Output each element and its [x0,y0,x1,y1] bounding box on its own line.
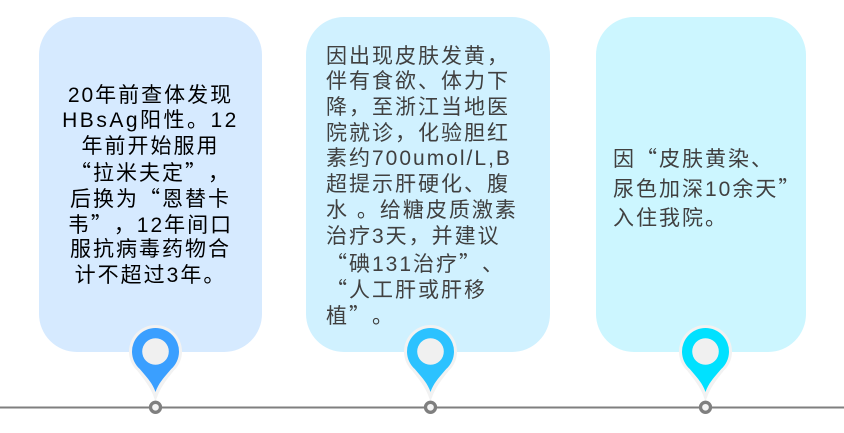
treatment text: 治疗3天，并建议 [326,225,501,248]
panel: local treatment card [306,17,550,352]
treatment text [326,45,518,330]
history text: “拉米夫定”， [70,157,231,187]
panel: history card [39,17,262,352]
history text: 韦”，12年间口 [68,209,233,239]
marker: second event [404,325,457,412]
treatment text: 植”。 [326,300,395,330]
treatment text: 院就诊，化验胆红 [326,122,510,145]
treatment text: 伴有食欲、体力下 [326,70,510,93]
history text [62,84,239,287]
history text: HBsAg阳性。12 [62,109,239,132]
marker: third event [679,325,732,412]
treatment text: 因出现皮肤发黄， [326,45,510,68]
admission text: 入住我院。 [613,207,728,230]
history text: 年前开始服用 [82,135,220,158]
admission text: 尿色加深10余天” [613,173,801,203]
treatment text: 水 。给糖皮质激素 [326,199,518,222]
treatment text: “人工肝或肝移 [326,274,487,304]
treatment text: 素约700umol/L,B [326,147,512,170]
history text: 服抗病毒药物合 [70,238,231,261]
history text: 计不超过3年。 [75,264,226,287]
treatment text: “碘131治疗”、 [326,248,505,278]
history text: 20年前查体发现 [68,84,233,107]
marker: first event [129,325,182,412]
admission text [613,143,801,230]
panel: admission card [596,17,806,352]
treatment text: 降，至浙江当地医 [326,96,510,119]
treatment text: 超提示肝硬化、腹 [326,173,510,196]
history text: 后换为“恩替卡 [70,183,231,213]
admission text: 因“皮肤黄染、 [613,143,774,173]
timeline axis [0,406,844,408]
